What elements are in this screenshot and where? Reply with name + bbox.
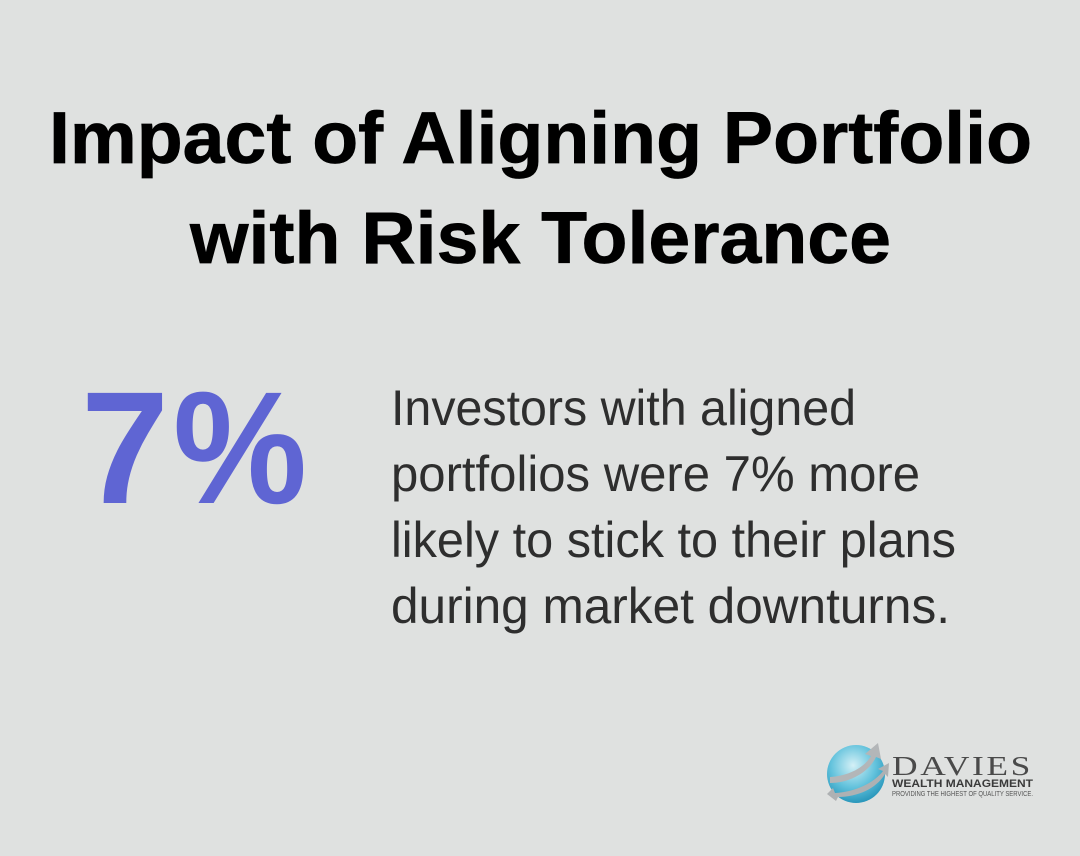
tagline: PROVIDING THE HIGHEST OF QUALITY SERVICE. <box>892 791 1033 798</box>
wordmark: DAVIES: DAVIES <box>892 751 1033 781</box>
description text: during market downturns. <box>391 578 950 634</box>
title <box>49 98 1032 279</box>
title: Impact of Aligning Portfolio <box>49 98 1032 179</box>
wordmark: WEALTH MANAGEMENT: WEALTH MANAGEMENT <box>892 778 1033 790</box>
logo: Davies Wealth Management <box>827 743 1033 803</box>
big statistic: 7%: 7 <box>81 358 169 537</box>
description text: portfolios were 7% more <box>391 446 920 502</box>
icon: globe with arrows <box>827 743 889 803</box>
description text <box>391 380 956 634</box>
description text: likely to stick to their plans <box>391 512 956 568</box>
description text: Investors with aligned <box>391 380 856 436</box>
big statistic: 7%: % <box>173 358 307 537</box>
title: with Risk Tolerance <box>189 198 891 279</box>
